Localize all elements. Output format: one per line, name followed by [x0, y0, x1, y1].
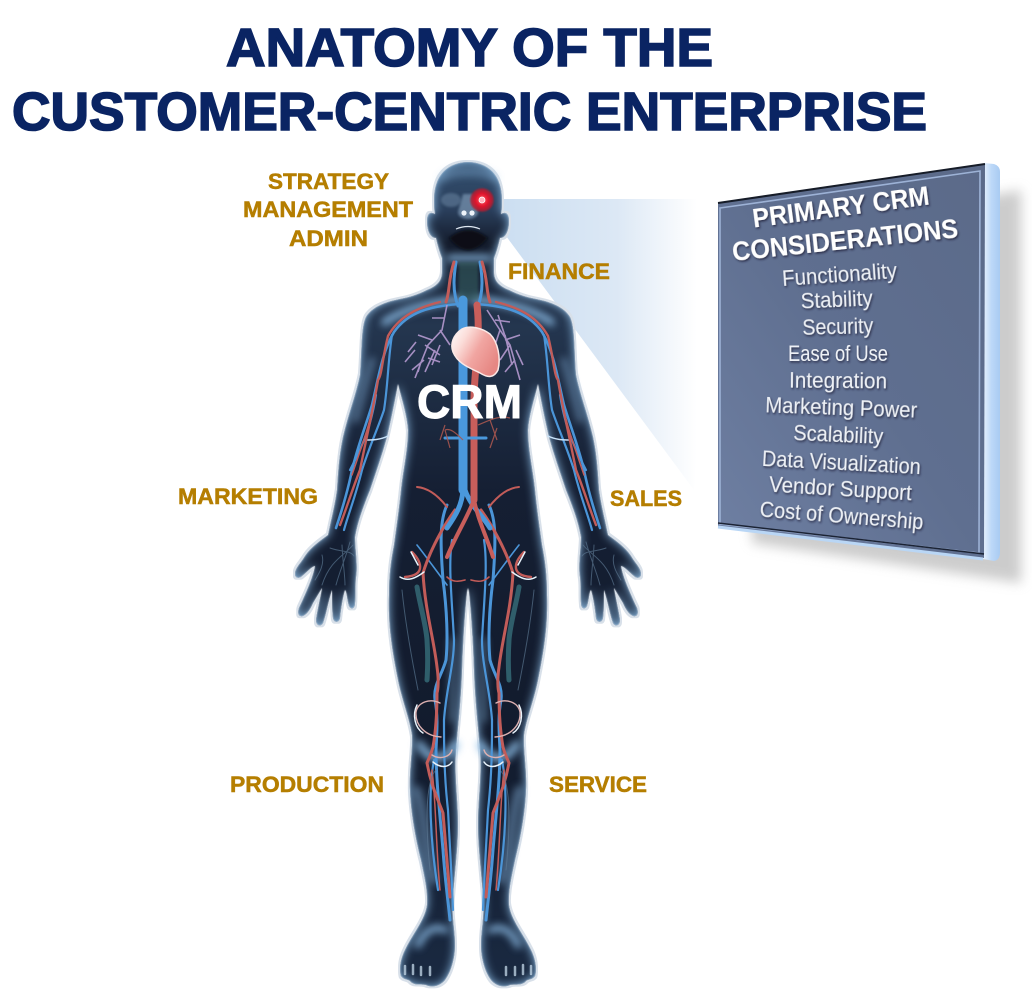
label: marketing: MARKETING [178, 484, 318, 509]
projection beam from eye to panel [498, 199, 714, 490]
body shading highlights [356, 172, 580, 945]
label: admin: ADMIN [289, 226, 368, 251]
panel list: Vendor Support [768, 472, 913, 505]
panel: primary CRM considerations [718, 163, 1021, 583]
red eye highlight [469, 187, 495, 213]
CRM label: CRM [417, 375, 522, 428]
veins and arteries, right side [471, 262, 621, 975]
title [12, 18, 927, 142]
body silhouette [295, 162, 641, 986]
panel list: Cost of Ownership [759, 497, 924, 534]
panel side edge [983, 163, 1000, 561]
label: finance: FINANCE [508, 259, 610, 284]
panel list: Functionality [781, 258, 898, 291]
label: strategy: STRATEGY [268, 169, 389, 194]
panel list: Security [802, 313, 874, 340]
title line 2: CUSTOMER-CENTRIC ENTERPRISE [12, 82, 927, 142]
lungs [405, 305, 523, 380]
label: management: MANAGEMENT [243, 197, 414, 222]
panel list [759, 258, 924, 534]
label: service: SERVICE [549, 772, 647, 797]
central vena cava and aorta [445, 300, 493, 557]
human figure with circulatory system [295, 162, 641, 986]
panel list: Integration [789, 368, 887, 393]
panel heading: PRIMARY CRM [751, 181, 931, 234]
panel list: Scalability [793, 420, 884, 449]
department labels [178, 169, 682, 797]
label: production: PRODUCTION [230, 772, 384, 797]
panel heading: CONSIDERATIONS [731, 213, 960, 267]
heart [452, 327, 499, 376]
title line 1: ANATOMY OF THE [226, 18, 713, 78]
panel heading [731, 181, 960, 267]
label: sales: SALES [610, 486, 682, 511]
panel list: Marketing Power [765, 392, 918, 423]
veins and arteries, left side [315, 262, 465, 975]
panel face [718, 164, 985, 558]
panel frame [720, 171, 980, 553]
panel shadow [752, 190, 1021, 583]
lower torso organs [440, 417, 510, 448]
panel list: Data Visualization [761, 446, 921, 479]
face features [441, 193, 488, 300]
panel list: Ease of Use [788, 341, 888, 366]
panel list: Stability [800, 285, 873, 314]
